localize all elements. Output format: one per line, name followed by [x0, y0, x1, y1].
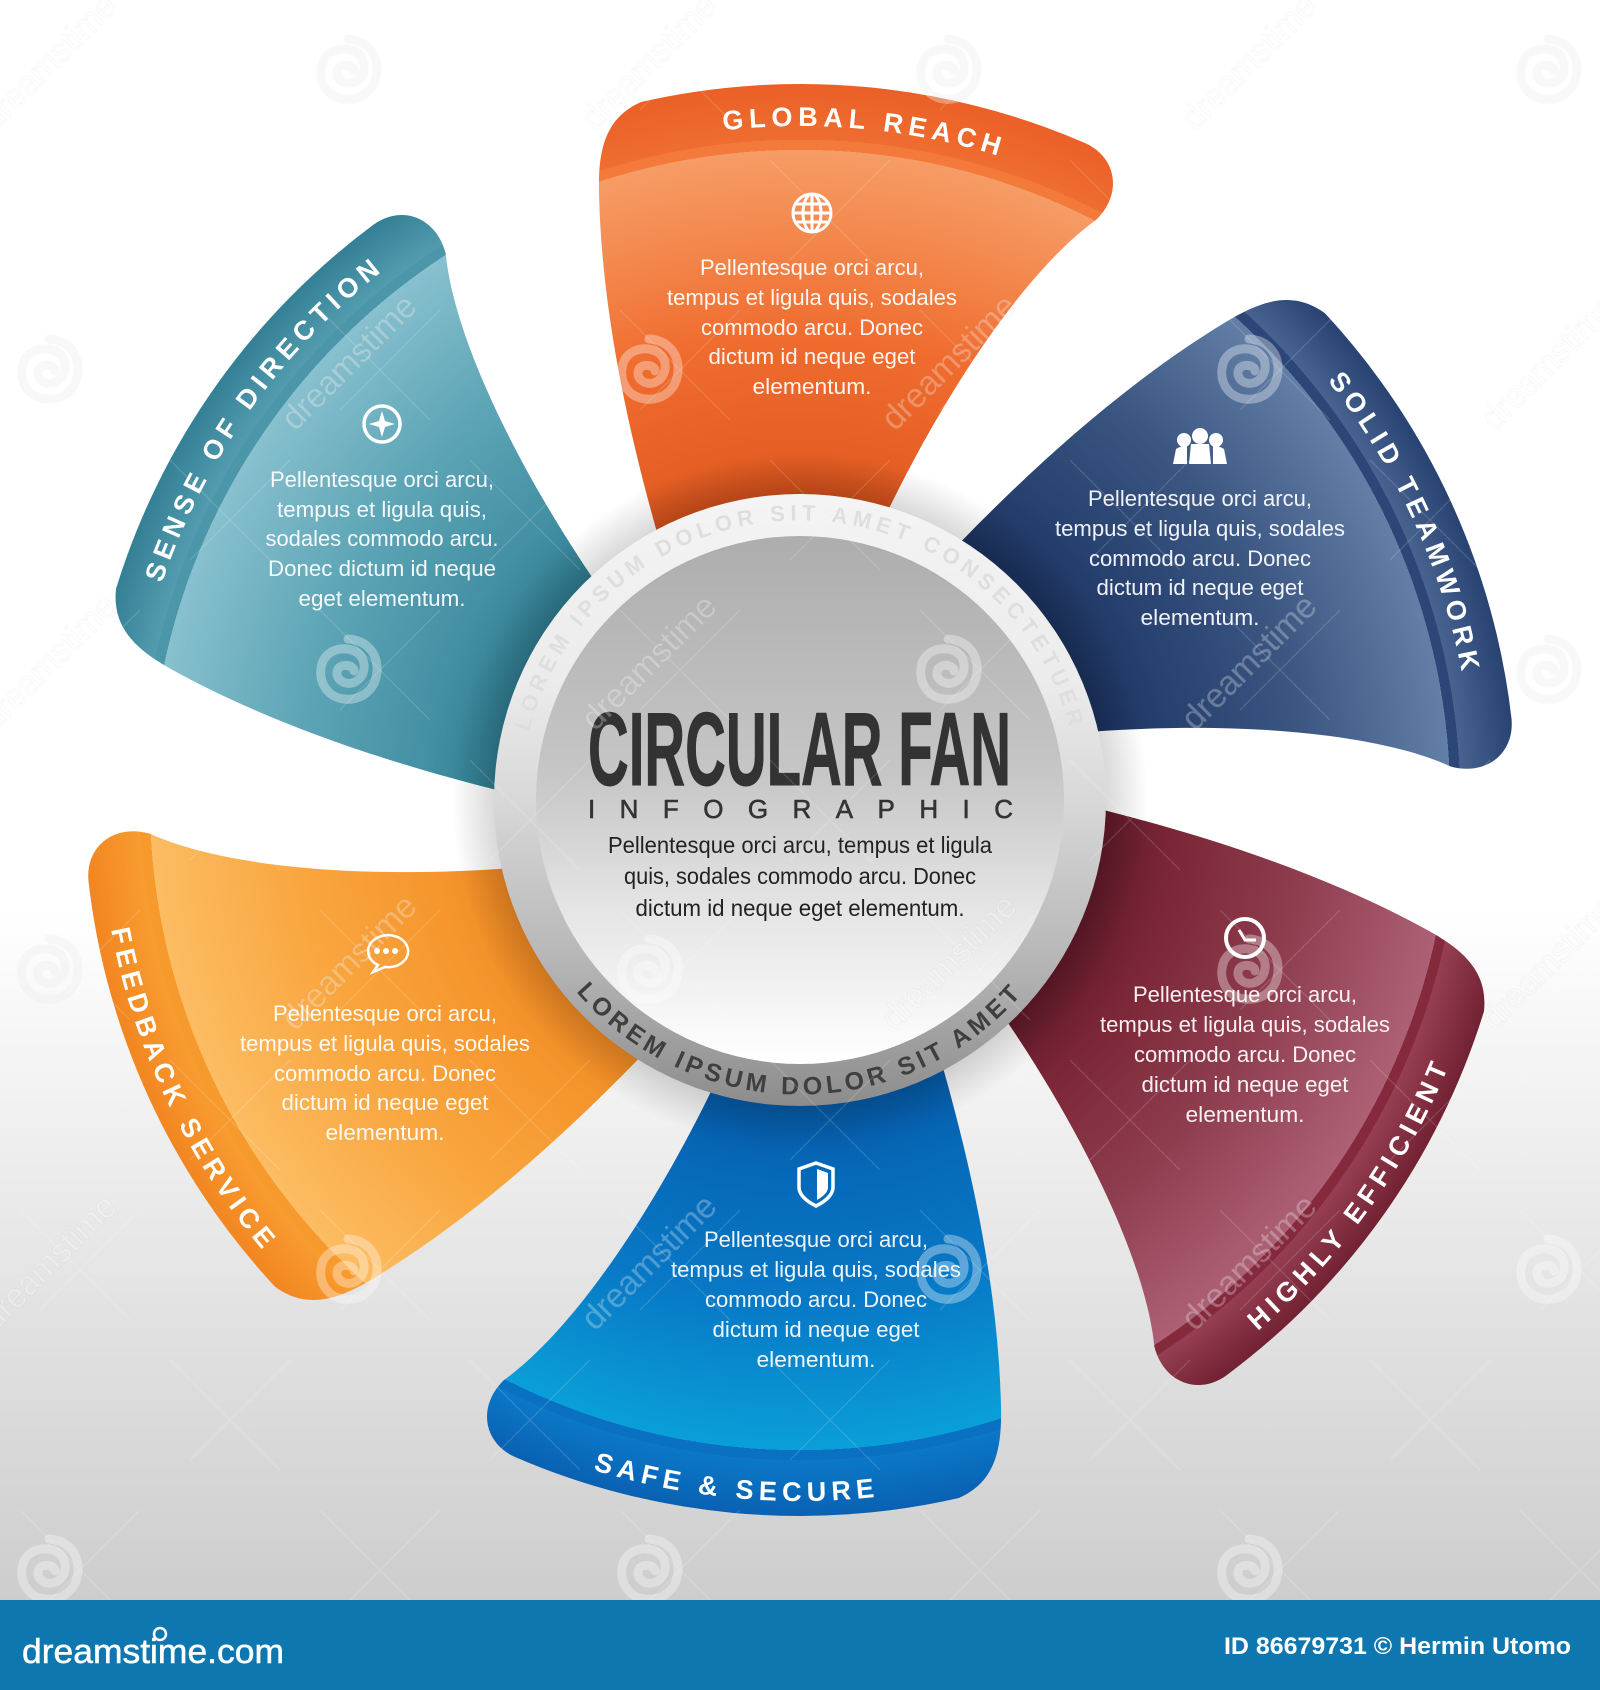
- text: safe and secure body: dictum id neque eget: [712, 1317, 920, 1342]
- hub body text: dictum id neque eget elementum.: [636, 895, 964, 921]
- text: safe and secure body: [671, 1227, 961, 1372]
- text: feedback service body: dictum id neque eget: [282, 1090, 488, 1115]
- footer logo spiral: [154, 1628, 166, 1640]
- watermark text: dreamstime: [274, 887, 424, 1038]
- panel: highly efficient: [1008, 810, 1484, 1385]
- text: highly efficient body: elementum.: [1186, 1102, 1304, 1127]
- hub: central circle: [494, 494, 1106, 1106]
- title: CIRCULAR FAN: [588, 692, 1011, 808]
- blade: feedback service: [23, 644, 701, 1332]
- panel: global reach: [598, 84, 1113, 530]
- label: feedback service: FEEDBACK SERVICE: [111, 927, 276, 1249]
- footer bar: [0, 1600, 1600, 1690]
- text: solid teamwork body: elementum.: [1140, 605, 1260, 630]
- panel: safe and secure: [487, 1070, 1002, 1516]
- text: safe and secure body: tempus et ligula quis, sodales: [671, 1257, 961, 1282]
- text: highly efficient body: tempus et ligula quis, sodales: [1100, 1012, 1390, 1037]
- hub body text: [608, 832, 992, 921]
- icon: globe: [793, 194, 831, 232]
- panel: solid teamwork: [962, 300, 1512, 769]
- text: global reach body: commodo arcu. Donec: [701, 315, 923, 340]
- text: global reach body: [667, 255, 957, 399]
- hub body text: Pellentesque orci arcu, tempus et ligula: [608, 832, 992, 858]
- footer logo: dreamstime.com: [22, 1633, 284, 1671]
- icon: team: [1173, 428, 1227, 464]
- text: safe and secure body: commodo arcu. Donec: [705, 1287, 927, 1312]
- panel: feedback service: [88, 831, 638, 1300]
- hub body text: quis, sodales commodo arcu. Donec: [624, 863, 976, 889]
- text: global reach body: dictum id neque eget: [708, 344, 916, 369]
- watermark text: dreamstime: [874, 287, 1024, 438]
- ring text: bottom: LOREM IPSUM DOLOR SIT AMET: [577, 982, 1017, 1094]
- text: feedback service body: commodo arcu. Donec: [274, 1061, 496, 1086]
- hub shadow: [452, 452, 1148, 1148]
- outer ring: [494, 494, 1106, 1106]
- text: solid teamwork body: Pellentesque orci arcu,: [1088, 486, 1312, 511]
- text: solid teamwork body: [1055, 486, 1345, 630]
- text: safe and secure body: elementum.: [756, 1347, 876, 1372]
- text: sense of direction body: [266, 467, 498, 611]
- label: highly efficient: HIGHLY EFFICIENT: [1246, 1060, 1446, 1330]
- text: sense of direction body: sodales commodo arcu.: [266, 526, 498, 551]
- text: global reach body: tempus et ligula quis, sodales: [667, 285, 957, 310]
- text: sense of direction body: tempus et ligula quis,: [277, 497, 487, 522]
- text: feedback service body: tempus et ligula quis, sodales: [240, 1031, 530, 1056]
- icon: shield: [799, 1163, 833, 1206]
- watermark spirals outline: [22, 39, 1577, 999]
- inner disc: [536, 536, 1064, 1064]
- blade: highly efficient: [843, 741, 1521, 1429]
- text: highly efficient body: Pellentesque orci arcu,: [1133, 982, 1357, 1007]
- text: global reach body: Pellentesque orci arcu,: [700, 255, 924, 280]
- text: sense of direction body: eget elementum.: [298, 586, 466, 611]
- text: solid teamwork body: tempus et ligula quis, sodales: [1055, 516, 1345, 541]
- text: feedback service body: elementum.: [326, 1120, 444, 1145]
- blade: global reach: [599, 84, 1113, 570]
- footer credit: ID 86679731 © Hermin Utomo: [1224, 1633, 1571, 1660]
- watermark text: dreamstime: [1174, 587, 1324, 738]
- text: global reach body: elementum.: [752, 374, 872, 399]
- watermark text: [0, 0, 1600, 1338]
- text: feedback service body: Pellentesque orci arcu,: [273, 1001, 497, 1026]
- watermark text: dreamstime: [274, 287, 424, 438]
- text: sense of direction body: Donec dictum id neque: [268, 556, 496, 581]
- watermark text: dreamstime: [874, 887, 1024, 1038]
- label: safe and secure: SAFE & SECURE: [594, 1454, 874, 1502]
- watermark text: dreamstime: [574, 587, 724, 738]
- text: feedback service body: [240, 1001, 530, 1145]
- text: highly efficient body: commodo arcu. Donec: [1134, 1042, 1356, 1067]
- ring text: top: LOREM IPSUM DOLOR SIT AMET CONSECTETUER: [522, 505, 1081, 714]
- subtitle: INFOGRAPHIC: [588, 794, 1013, 824]
- text: solid teamwork body: dictum id neque eget: [1096, 575, 1304, 600]
- label: global reach: GLOBAL REACH: [723, 107, 1002, 156]
- text: solid teamwork body: commodo arcu. Donec: [1089, 546, 1311, 571]
- icon: compass: [364, 406, 400, 442]
- text: highly efficient body: [1100, 982, 1390, 1127]
- blade: sense of direction: [79, 171, 757, 859]
- text: safe and secure body: Pellentesque orci arcu,: [704, 1227, 928, 1252]
- panel: sense of direction: [116, 215, 592, 790]
- label: solid teamwork: SOLID TEAMWORK: [1330, 372, 1480, 672]
- text: highly efficient body: dictum id neque eget: [1142, 1072, 1348, 1097]
- icon: speech bubble: [368, 935, 408, 972]
- label: sense of direction: SENSE OF DIRECTION: [146, 258, 380, 582]
- watermark text: dreamstime: [1174, 1187, 1324, 1338]
- watermark text: dreamstime: [574, 1187, 724, 1338]
- blade: safe and secure: [487, 1030, 1001, 1516]
- icon: clock: [1226, 919, 1264, 957]
- blade: solid teamwork: [899, 268, 1577, 956]
- text: sense of direction body: Pellentesque orci arcu,: [270, 467, 494, 492]
